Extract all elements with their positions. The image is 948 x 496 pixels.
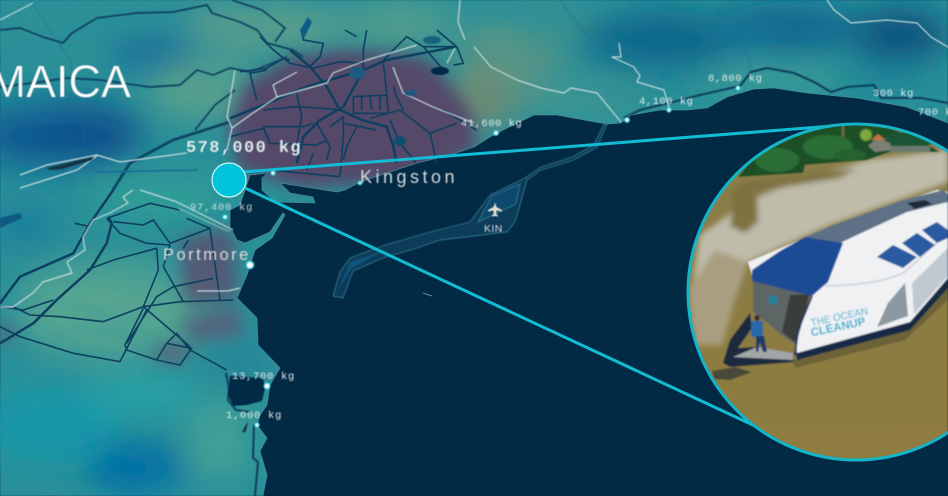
map: coastline edge	[230, 88, 948, 496]
place label: Portmore: Portmore	[163, 246, 251, 264]
river mouth markers	[223, 86, 740, 427]
value label: 41,600 kg	[461, 118, 522, 130]
value label: 1,000 kg	[226, 410, 282, 422]
map: rivers	[0, 0, 948, 307]
texture	[9, 26, 800, 489]
main river mouth marker	[212, 163, 246, 197]
tree reflection	[730, 168, 857, 233]
map: Portmore roads	[0, 190, 233, 370]
white hull	[748, 190, 948, 353]
value label: 13,700 kg	[232, 371, 295, 383]
value label: 300 kg	[873, 88, 914, 100]
glass roof	[803, 190, 948, 243]
barge logo: CLEANUP	[810, 316, 867, 339]
light reflecting water	[690, 148, 948, 284]
airport icon	[488, 202, 502, 216]
lagoon near Hellshire	[228, 376, 265, 406]
map: Kingston roads	[230, 30, 477, 177]
crew member	[751, 315, 767, 352]
place label: Kingston: Kingston	[360, 167, 458, 187]
map: lakes and lagoons	[0, 17, 449, 433]
value label: 97,400 kg	[190, 202, 253, 214]
photo water	[684, 122, 948, 462]
main value label: 578,000 kg	[186, 139, 302, 158]
boat deck	[723, 313, 794, 367]
photo: Interceptor barge in circular frame	[684, 122, 948, 462]
connector line: upper	[243, 124, 852, 172]
barge logo: THE OCEAN	[810, 306, 869, 329]
value label: 8,800 kg	[708, 73, 762, 85]
hull edge	[825, 232, 948, 286]
solar panels	[877, 245, 917, 268]
canopy frame	[795, 296, 812, 355]
blue canopy	[752, 237, 843, 296]
value label: 4,100 kg	[639, 96, 693, 108]
house	[868, 138, 892, 152]
interior opening	[753, 281, 810, 345]
hull shadow base	[793, 283, 948, 368]
map: small islet	[423, 293, 432, 296]
map: Palisadoes spit and harbour islands	[333, 124, 607, 298]
hull windows	[877, 283, 908, 327]
trees	[738, 122, 940, 177]
photo ring	[688, 124, 948, 460]
connector line: lower	[245, 188, 755, 426]
airport label: KIN	[484, 223, 503, 235]
